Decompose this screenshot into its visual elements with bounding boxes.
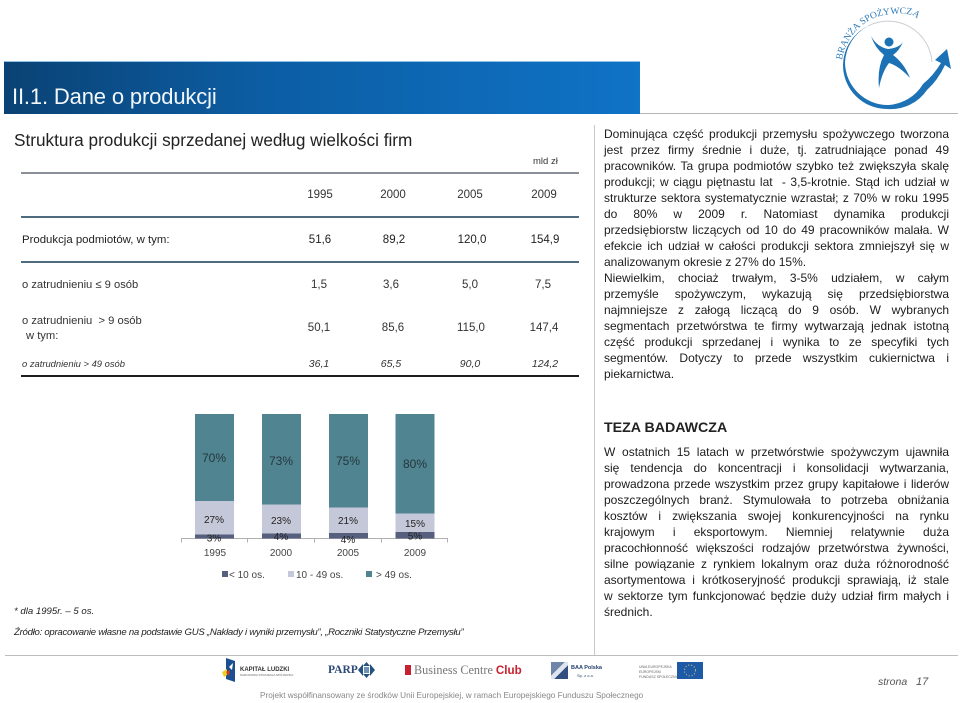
bar 2000: 73% [269,454,293,468]
logo: European Union: EUROPEJSKI [639,670,661,674]
section title: II.1. Dane o produkcji [12,84,217,109]
logo: Branża Spożywcza: BRANŻA SPOŻYWCZA [836,8,919,60]
bar 2000: 23% [271,516,291,527]
table heading: Struktura produkcji sprzedanej według wielkości firm [14,130,412,150]
logo: BAA Polska [551,662,602,679]
logo: Kapitał Ludzki: KAPITAŁ LUDZKI [240,667,289,673]
stacked bar chart [181,414,448,581]
year labels [204,548,427,559]
text block: research thesis: kosztów i zwiększania swojej konkurencyjności na rynku [604,509,949,523]
footer project note: Projekt współfinansowany ze środków Unii Europejskiej, w ramach Europejskiego Funduszu Społecznego [260,691,643,700]
row: over 49 employees: 124,2 [532,358,558,370]
source note: Źródło: opracowanie własne na podstawie GUS „Nakłady i wyniki przemysłu”, „Roczniki Statystyczne Przemysłu” [14,627,463,638]
row: up to 9 employees: o zatrudnieniu ≤ 9 osób [22,279,138,291]
logo: BAA Polska: BAA Polska [571,665,602,671]
row: up to 9 employees: 7,5 [535,279,551,291]
text block: firm structure commentary: jest przez firmy średnie i duże, tj. zatrudniające ponad 49 [604,143,949,157]
logo: BAA Polska: Sp. z o.o. [577,673,594,678]
logo: Branża Spożywcza [836,8,951,110]
text block: research thesis: pracochłonność większości rodzajów przetwórstwa żywności, [604,541,949,555]
row: over 9 employees: 50,1 [308,322,330,334]
legend [222,570,412,581]
logo: PARP [328,662,375,678]
logo: Kapitał Ludzki [222,658,294,682]
text block: firm structure commentary: przemyśle spożywczym, wykazują się przedsiębiorstwa [604,287,949,301]
header bar with section title [4,61,640,114]
years row: 2000 [380,189,406,201]
text block: firm structure commentary: Dominująca część produkcji przemysłu spożywczego tworzona [604,127,949,141]
row: total production: 154,9 [531,234,559,246]
bar 1995 [195,414,234,544]
logo: Business Centre Club: Business Centre Club [414,663,522,677]
table: production by firm size [21,156,579,377]
legend: > 49 os. [376,570,412,581]
legend: < 10 os. [229,570,265,581]
bar 2000 [262,414,301,543]
row: over 49 employees: 65,5 [381,358,401,370]
bar 2009 [396,414,434,542]
text block: firm structure commentary: do 80% w 2009 r. Natomiast dynamika produkcji [604,207,949,221]
bar 2009: 15% [405,519,425,530]
text block: firm structure commentary: produkcji; w ciągu piętnastu lat - 3,5-krotnie. Stąd ich udział w [604,175,949,189]
vertical divider [594,125,595,655]
text block: research thesis: w sektorze tym funkcjonować będzie duży udział firm małych i [604,589,949,603]
text block: research thesis: prowadzona przede wszystkim przez grupy kapitałowe i liderów [604,477,949,491]
row: over 49 employees: o zatrudnieniu > 49 osób [22,358,125,369]
years row: 1995 [307,189,333,201]
years row: 2009 [531,189,557,201]
row: total production: 89,2 [383,234,405,246]
legend: 10 - 49 os. [296,570,343,581]
logo: European Union: UNIA EUROPEJSKA [639,665,672,669]
year labels: 2009 [404,548,427,559]
text block: firm structure commentary: segmentach przetwórstwa te firmy wytwarzają jednak istotną [604,319,949,333]
row: over 9 employees: 115,0 [457,322,485,334]
row: over 49 employees [22,358,558,370]
years row [307,189,557,201]
year labels: 1995 [204,548,227,559]
bar 1995: 27% [204,515,224,526]
bar 2005: 75% [336,454,360,468]
bar 1995: 70% [202,451,226,465]
row: over 9 employees [22,315,558,342]
row: total production: 120,0 [458,234,486,246]
row: up to 9 employees: 3,6 [383,279,399,291]
footer rule [5,655,958,656]
row: up to 9 employees [22,279,551,291]
row: over 9 employees: 147,4 [530,322,558,334]
text block: research thesis: asortymentowa i krótkoseryjność produkcji sprawiają, iż stale [604,573,949,587]
text block: research thesis: krajowym i eksportowym. Niemniej relatywnie duża [604,525,949,539]
page number: 17 [916,676,928,688]
text block: research thesis: W ostatnich 15 latach w przetwórstwie spożywczym ujawniła [604,445,949,459]
text block: firm structure commentary: segmentów. Dotyczy to przede wszystkim cukiernictwa i [604,351,949,365]
footnote: * dla 1995r. – 5 os. [14,606,94,617]
text block: research thesis: silne powiązanie z rynkiem lokalnym oraz duża różnorodność [604,557,949,571]
bar 2009: 80% [403,457,427,471]
logo: European Union [639,662,703,679]
logo: Kapitał Ludzki: NARODOWA STRATEGIA SPÓJNOŚCI [240,673,293,677]
thesis heading: TEZA BADAWCZA [604,420,727,436]
text block: firm structure commentary: piekarnictwa. [604,367,674,381]
footer logos [222,658,703,682]
text block: firm structure commentary: część produkcji sprzedanej i wynika to ze specyfiki tych [604,335,949,349]
page label: strona [878,676,907,688]
year labels: 2005 [337,548,360,559]
text block: firm structure commentary: pracowników. Ta grupa podmiotów szybko też zwiększyła skalę [604,159,949,173]
bar 2005 [329,414,368,546]
text block: firm structure commentary: najmniejsze z załogą liczącą do 9 osób. W wybranych [604,303,949,317]
bar 2009: 5% [408,532,422,542]
text block: research thesis: się tendencja do koncentracji i konsolidacji wytwarzania, [604,461,949,475]
text block: firm structure commentary: przedsiębiorstw liczących od 10 do 49 pracowników malała. W [604,223,949,237]
text block: research thesis: średnich. [604,605,653,619]
years row: 2005 [457,189,483,201]
text block: firm structure commentary: strukturze sektora systematycznie wzrastał; z 70% w roku 1995 [604,191,949,205]
row: over 49 employees: 90,0 [460,358,480,370]
header rule [640,113,958,114]
logo: European Union: FUNDUSZ SPOŁECZNY [639,675,678,679]
unit label: mld zł [533,156,558,167]
row: up to 9 employees: 1,5 [311,279,327,291]
row: over 49 employees: 36,1 [309,358,329,370]
year labels: 2000 [270,548,293,559]
row: over 9 employees: 85,6 [382,322,404,334]
text block: research thesis: poszczególnych branż. Stymulowała to potrzeba obniżania [604,493,949,507]
row: over 9 employees: o zatrudnieniu > 9 osób [22,315,142,327]
row: over 9 employees: w tym: [26,330,58,342]
bar 2005: 21% [338,516,358,527]
row: total production: 51,6 [309,234,331,246]
text block: firm structure commentary: analizowanym okresie z 27% do 15%. [604,255,806,269]
row: up to 9 employees: 5,0 [462,279,478,291]
axis [181,538,448,542]
text block: firm structure commentary: Niewielkim, chociaż trwałym, 3-5% udziałem, w całym [604,271,949,285]
text block: firm structure commentary [604,127,950,381]
text block: firm structure commentary: efekcie ich udział w całości produkcji sektora zmniejszył się w [604,239,949,253]
bar 2005: 4% [341,535,355,546]
row: total production: Produkcja podmiotów, w tym: [22,234,170,246]
row: total production [22,234,559,246]
bar 2000: 4% [274,532,288,543]
bar 1995: 3% [207,534,221,544]
text block: research thesis [604,445,950,619]
logo: PARP: PARP [328,664,358,676]
